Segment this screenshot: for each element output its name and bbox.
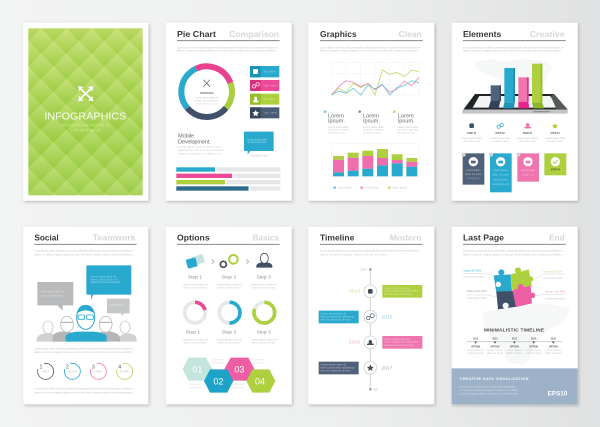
legend buttons: Your label [263, 70, 276, 73]
page: social [23, 227, 148, 404]
puzzle callouts: Option 04 40% [545, 289, 566, 293]
step icons row: Lorem ipsum dolor [517, 136, 537, 140]
heading [177, 233, 280, 244]
intro text: labore et dolore magna aliqua ut enim ad minim veniam quis nostrud exercitation [177, 49, 276, 53]
numbered puzzle hexagons: 02 [213, 376, 223, 386]
step labels top: amet consectetur [252, 286, 275, 290]
milestone 2014: amet consectetur adipiscing [384, 290, 418, 293]
step cards: Lorem ipsum [466, 169, 480, 172]
intro text: labore et dolore magna aliqua ut enim ad minim veniam quis nostrud exercitation [320, 49, 419, 53]
icon: chevron [246, 259, 249, 264]
heading [320, 233, 423, 244]
horizontal timeline: 2014 [531, 337, 537, 340]
three lorem columns: sit amet consect [363, 128, 384, 132]
step icons row: STEP 04 [550, 132, 560, 135]
milestone 2016: Lorem ipsum dolor sit [384, 338, 410, 341]
icon: gears [220, 255, 238, 267]
legend buttons: Your label [263, 84, 278, 87]
puzzle callouts: Option 02 20% [467, 289, 487, 293]
step icons row: sit amet cons [519, 139, 536, 143]
step labels top: Lorem ipsum dolor sit [251, 282, 277, 286]
step cards: dolor sit amet [465, 173, 482, 176]
icon: chevron [212, 259, 214, 264]
progress rings [185, 302, 275, 323]
three lorem columns: Lorem [363, 113, 379, 119]
three lorem columns: Ipsum. [398, 119, 415, 125]
vertical axis [360, 267, 378, 391]
horizontal timeline: dolor sit amet [526, 351, 542, 355]
footer band: Lorem ipsum dolor sit amet consectetur adipiscing [460, 386, 515, 389]
horizontal timeline: dolor sit amet [468, 351, 484, 355]
page: elements [452, 23, 578, 201]
cover subtitle [61, 123, 111, 133]
footer band: EPS10 [548, 391, 568, 397]
legend buttons: Your label [263, 112, 278, 115]
step labels top [182, 274, 277, 290]
page: timeline [308, 227, 434, 404]
hexagon captions: ipsum [212, 361, 224, 365]
step icons row: Lorem ipsum dolor [462, 136, 482, 140]
horizontal timeline: 2015 [551, 338, 557, 340]
heading: End [549, 233, 565, 243]
step labels top: Step 1 [188, 274, 202, 280]
three lorem columns: Ipsum. [328, 119, 345, 125]
intro text: labore et dolore magna aliqua ut enim ad minim veniam quis nostrud exercitation [34, 252, 133, 256]
cover title: INFOGRAPHICS [44, 112, 126, 123]
milestone 2015: sed do eiusmod tempor [321, 319, 351, 322]
icon: puzzle [186, 254, 205, 269]
puzzle graphic [494, 267, 535, 309]
puzzle callouts: Lorem ipsum dolor [545, 297, 565, 301]
step labels bottom: Step 2 [222, 329, 236, 335]
step icons row: STEP 02 [495, 133, 505, 135]
step cards: Lorem ipsum [521, 169, 535, 172]
mobile development text: Lorem ipsum dolor sit amet cons [178, 145, 221, 149]
milestone 2017: Lorem ipsum dolor sit [321, 364, 346, 367]
horizontal timeline: dolor sit amet [487, 351, 503, 355]
speech bubbles: Lorem ipsum [109, 303, 123, 306]
footer band: et dolore magna aliqua ut enim ad minim veniam [460, 392, 518, 395]
intro text: Lorem ipsum dolor sit amet consectetur adipiscing elit sed do eiusmod tempor incididunt ut [463, 249, 563, 253]
world map backdrop [483, 304, 570, 365]
heading: Comparison [229, 29, 279, 39]
vertical axis: END [373, 387, 378, 391]
puzzle callouts: Lorem ipsum dolor [543, 276, 563, 280]
heading: Last Page [463, 233, 504, 243]
milestone 2015: 2015 [381, 315, 393, 321]
page: graphics [308, 23, 434, 201]
hexagon captions [190, 357, 265, 389]
intro text [463, 249, 563, 257]
intro text [177, 45, 278, 53]
horizontal timeline [467, 337, 562, 355]
three lorem columns: adipiscing [398, 130, 415, 134]
numbered circles: FOURTH [120, 370, 129, 374]
milestone 2014 [349, 285, 422, 298]
step labels top: amet consectetur [217, 286, 241, 290]
step cards: adipiscing elit [492, 183, 509, 186]
milestone 2014: Lorem ipsum dolor sit [384, 287, 410, 290]
body text: Lorem ipsum dolor sit amet consectetur adipiscing elit sed do eiusmod tempor incididunt ut [34, 346, 134, 350]
heading [34, 233, 137, 244]
mobile development text [178, 134, 223, 155]
horizontal timeline: Lorem ipsum [526, 348, 542, 352]
milestone 2017: sed do eiusmod tempor [321, 370, 351, 373]
step labels top: Lorem ipsum dolor sit [216, 282, 242, 286]
icon: person [256, 253, 272, 268]
numbered puzzle hexagons: 03 [234, 364, 244, 374]
step cards: dolor sit [522, 174, 534, 177]
numbered circles: FIRST [42, 370, 49, 374]
heading: Social [34, 233, 59, 243]
intro text [320, 45, 420, 53]
speech bubbles: Lorem ipsum dolor sit [41, 290, 64, 293]
heading [463, 233, 566, 244]
step labels top: Lorem ipsum dolor sit [182, 282, 208, 286]
speech bubble [244, 132, 274, 157]
chart legend: Lorem ipsum [364, 186, 380, 190]
legend buttons [250, 66, 279, 118]
heading: Teamwork [93, 233, 136, 243]
world map backdrop [475, 59, 553, 86]
milestone 2017: 2017 [381, 365, 393, 371]
heading: Graphics [320, 29, 357, 39]
footer text [34, 387, 134, 394]
heading: Options [177, 233, 210, 243]
donut chart [171, 56, 242, 127]
milestone 2014: sed do eiusmod tempor [384, 293, 413, 296]
page: last page [452, 227, 578, 404]
speech bubbles [37, 265, 131, 316]
hexagon captions: ipsum [233, 385, 244, 389]
hexagon captions: Lorem [253, 357, 265, 361]
three lorem columns: Lorem [328, 113, 344, 119]
numbered puzzle hexagons: 01 [192, 364, 202, 374]
speech bubbles: amet consectetur [41, 294, 63, 297]
three lorem columns: Lorem ipsum dolor [363, 125, 384, 129]
donut centre label [195, 80, 219, 106]
line chart [331, 63, 419, 95]
hexagon captions: Lorem [212, 357, 223, 361]
step icons row: STEP 03 [523, 133, 533, 135]
heading [177, 29, 280, 41]
speech bubbles: adipiscing sed do eiusmod [91, 282, 121, 284]
milestone 2016: 2016 [349, 340, 360, 346]
cover green quilted panel [28, 28, 143, 195]
milestone 2015: amet consectetur adipiscing [321, 315, 355, 318]
intro text: labore et dolore magna aliqua ut enim ad minim [320, 253, 387, 257]
heading: Timeline [320, 233, 355, 243]
horizontal timeline: OPTION [549, 347, 558, 349]
puzzle callouts [463, 268, 566, 301]
milestone 2015: Lorem ipsum dolor sit [321, 313, 346, 316]
numbered circles: SECOND [68, 370, 77, 374]
hexagon captions: ipsum [190, 385, 201, 389]
horizontal timeline: Lorem ipsum [487, 348, 504, 352]
chart legend [333, 186, 407, 190]
step labels bottom: Lorem ipsum dolor sit [216, 337, 242, 341]
milestone 2017: amet consectetur adipiscing [321, 366, 355, 369]
heading: Basics [253, 233, 279, 243]
milestone 2016 [349, 336, 422, 349]
step labels bottom: amet consectetur [183, 341, 207, 345]
horizontal timeline: Lorem ipsum [545, 348, 562, 352]
donut centre label: adipiscing [197, 102, 217, 106]
cover subtitle: FOR BUSINESS [71, 129, 101, 133]
heading: Elements [463, 29, 502, 39]
3D bar chart [488, 64, 544, 108]
step cards: Lorem ipsum [494, 169, 508, 172]
milestone 2016: amet consectetur adipiscing [384, 341, 418, 344]
numbered circles [37, 362, 133, 379]
three lorem columns [324, 110, 419, 134]
step labels bottom [182, 329, 277, 345]
puzzle callouts: Lorem ipsum dolor [464, 274, 484, 278]
horizontal timeline: Lorem ipsum [506, 348, 523, 352]
heading: Pie Chart [177, 29, 216, 39]
speech bubbles: Lorem ipsum dolor sit [91, 276, 116, 279]
heading: Modern [390, 233, 422, 243]
heading: Creative [530, 29, 565, 39]
step cards: consect [467, 177, 480, 180]
speech bubble: sit amet consect [247, 141, 266, 144]
intro text: Lorem ipsum dolor sit amet consectetur adipiscing elit sed do eiusmod tempor incididunt ut [177, 45, 278, 49]
step labels bottom: Lorem ipsum dolor sit [251, 337, 277, 341]
minimalistic timeline title: MINIMALISTIC TIMELINE [484, 327, 544, 332]
numbered circles: 4 [118, 364, 121, 370]
numbered puzzle hexagons: 04 [255, 376, 265, 386]
intro text: Lorem ipsum dolor sit amet consectetur adipiscing elit sed do eiusmod tempor incididunt ut [320, 249, 420, 253]
hexagon captions: Lorem [190, 382, 202, 386]
step cards: dolor sit amet [492, 174, 509, 177]
horizontal timeline: 2013 [512, 338, 518, 340]
three lorem columns: Lorem ipsum dolor [328, 125, 349, 129]
heading: Clean [399, 29, 422, 39]
intro text [463, 45, 563, 53]
step labels bottom: amet consectetur [252, 341, 275, 345]
three lorem columns: adipiscing [363, 130, 380, 134]
mobile development text: tempor incididunt ut labore et [178, 151, 221, 155]
step labels bottom: Lorem ipsum dolor sit [182, 337, 208, 341]
mobile development text: adipiscing elit sed do eiusmod [178, 148, 223, 152]
footer text: Lorem ipsum dolor sit amet consectetur adipiscing elit sed do eiusmod tempor incididunt ut [34, 387, 134, 391]
three lorem columns: Ipsum. [363, 119, 380, 125]
three lorem columns: Lorem [398, 113, 414, 119]
three lorem columns: sit amet consect [328, 128, 349, 132]
cover subtitle: BROCHURE AND FLYERS OF [61, 123, 111, 127]
numbered circles: 1 [40, 364, 43, 370]
intro text: Lorem ipsum dolor sit amet consectetur adipiscing elit sed do eiusmod tempor incididunt ut [34, 249, 134, 253]
puzzle callouts: Option 01 10% [464, 268, 482, 272]
speech bubble: Lorem ipsum dolor [250, 153, 268, 157]
footer text: labore et dolore magna aliqua ut enim ad minim veniam quis nostrud exercitation [34, 390, 133, 394]
step cards [462, 153, 566, 192]
step labels bottom: Step 3 [256, 329, 271, 335]
three lorem columns: adipiscing [328, 130, 345, 134]
step icons row: sit amet cons [492, 139, 509, 143]
intro text [34, 249, 134, 256]
footer band: elit sed do eiusmod tempor incididunt ut labore [460, 389, 519, 392]
horizontal timeline: 2011 [473, 338, 479, 340]
milestone 2014: 2014 [349, 289, 360, 295]
mobile development text: Mobile [178, 134, 194, 140]
numbered circles: 2 [66, 364, 69, 370]
numbered puzzle hexagons [183, 358, 275, 393]
horizontal timeline: 2012 [492, 338, 498, 340]
horizontal timeline: OPTION [471, 347, 480, 349]
hexagon captions: Lorem [233, 382, 245, 386]
step labels top: Step 3 [256, 274, 271, 280]
intro text: Lorem ipsum dolor sit amet consectetur adipiscing elit sed do eiusmod tempor incididunt ut [463, 45, 563, 49]
intro text: labore et dolore magna aliqua ut enim ad minim veniam quis nostrud exercitation [463, 253, 562, 257]
step icons row [462, 123, 565, 143]
team of people [37, 305, 137, 342]
page: cover [23, 23, 148, 201]
progress bars [176, 167, 280, 191]
three lorem columns: sit amet consect [398, 128, 419, 132]
body text [34, 346, 134, 354]
icon: crossed arrows [78, 86, 93, 101]
stacked bar chart [331, 144, 419, 176]
donut centre label: amet consectetur [195, 99, 219, 103]
milestone 2015 [319, 310, 393, 323]
intro text [320, 249, 420, 257]
mobile development text: Development. [178, 139, 211, 145]
step icons row: sit amet cons [463, 139, 481, 143]
body text: labore et dolore magna aliqua ut enim ad minim veniam quis nostrud exercitation [34, 350, 133, 354]
donut centre label: Lorem ipsum dolor sit [195, 96, 219, 100]
horizontal timeline: OPTION [529, 347, 538, 349]
three lorem columns: Lorem ipsum dolor [398, 125, 418, 129]
step labels top: amet consectetur [183, 286, 207, 290]
step cards: consectetur [493, 178, 508, 181]
horizontal timeline: dolor sit amet [545, 351, 562, 355]
page: options [166, 227, 292, 404]
puzzle callouts: Option 03 30% [543, 269, 563, 273]
footer band [452, 368, 578, 404]
intro text: Lorem ipsum dolor sit amet consectetur adipiscing elit sed do eiusmod tempor incididunt ut [320, 45, 420, 49]
speech bubble: Lorem ipsum dolor [247, 138, 268, 141]
horizontal timeline: dolor sit amet [506, 351, 523, 355]
chart legend: Lorem ipsum [392, 186, 407, 190]
horizontal timeline: OPTION [510, 347, 519, 349]
heading [463, 29, 566, 41]
step labels bottom: Step 1 [186, 329, 200, 335]
numbered circles: 3 [92, 364, 95, 370]
horizontal timeline: OPTION [491, 347, 500, 349]
horizontal timeline: Lorem ipsum [468, 348, 484, 352]
footer band: CREATIVE DATA VISUALIZATION [460, 377, 529, 381]
step icons row: Lorem ipsum dolor [490, 136, 510, 140]
milestone 2017 [319, 361, 393, 374]
milestone 2016: sed do eiusmod tempor [384, 344, 415, 347]
heading [320, 29, 423, 41]
step cards: STEP 04 [551, 168, 561, 171]
step icons row: sit amet cons [547, 139, 564, 143]
step labels top: Step 2 [222, 274, 236, 280]
intro text: labore et dolore magna aliqua ut enim ad minim veniam quis nostrud exercitation [463, 49, 562, 53]
step labels bottom: amet consectetur [217, 341, 241, 345]
puzzle callouts: Lorem ipsum dolor [467, 296, 487, 300]
vertical axis: START [360, 267, 368, 271]
step icons row: Lorem ipsum dolor [545, 136, 565, 140]
hexagon captions: ipsum [253, 361, 265, 365]
step icons row: STEP 01 [467, 133, 477, 135]
numbered circles: THIRD [95, 370, 102, 374]
tablet [462, 94, 568, 114]
legend buttons: Your label [263, 98, 274, 101]
speech bubbles: amet consectetur elit [91, 278, 118, 281]
page: pie chart [166, 23, 292, 201]
donut centre label: CHOICES [200, 91, 213, 95]
chart legend: Lorem ipsum [337, 186, 353, 190]
